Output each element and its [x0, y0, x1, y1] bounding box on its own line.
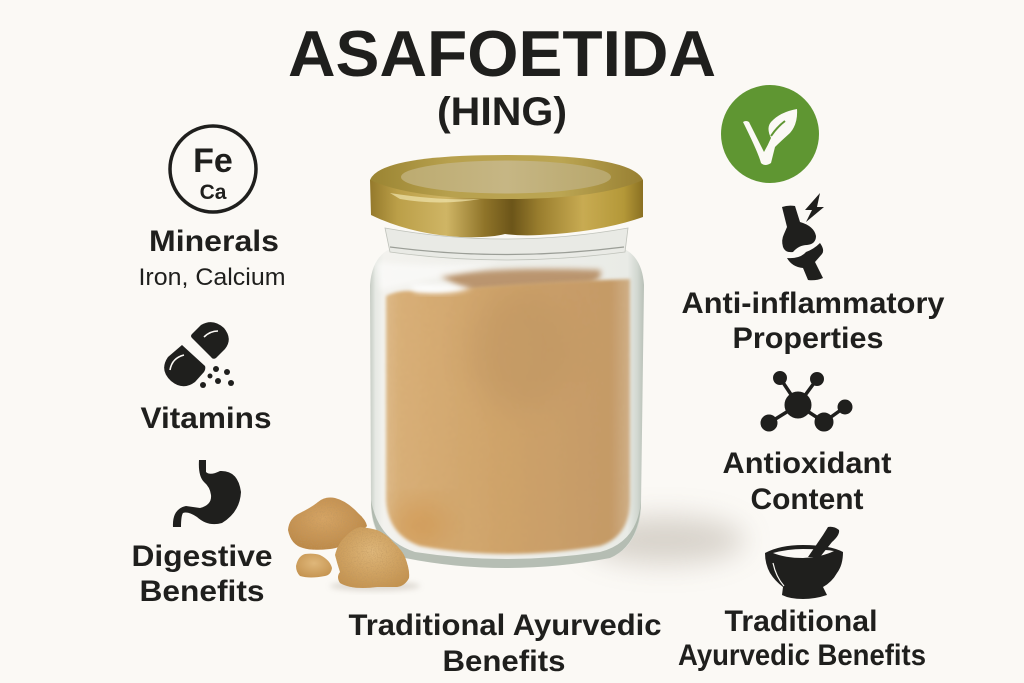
- heading: antioxidant content: Antioxidant: [722, 447, 892, 480]
- lid inner panel: [401, 160, 611, 194]
- icon: Fe Ca element circle: Ca: [200, 181, 227, 204]
- antioxidant group: [722, 372, 892, 516]
- vitamins group: [140, 322, 272, 435]
- heading: vitamins: Vitamins: [140, 402, 272, 435]
- resin lumps: [288, 498, 420, 591]
- icon: stomach: [173, 460, 241, 527]
- powder fill: [380, 270, 636, 565]
- bottom caption: [348, 609, 662, 678]
- anti-inflammatory group: [682, 193, 945, 355]
- lid highlight: [390, 193, 480, 202]
- heading: anti-inflammatory properties: Anti-inflammatory: [682, 287, 945, 320]
- icon: molecule: [761, 372, 852, 431]
- icon: vegan leaf badge: [721, 85, 819, 183]
- subtitle: (HING): [437, 90, 567, 134]
- bottom caption: Benefits: [442, 645, 566, 678]
- glass base: [371, 500, 641, 568]
- glass body: [370, 248, 644, 568]
- traditional benefits right group: Ayurvedic Benefits: [678, 639, 926, 672]
- anti-inflammatory group: Properties: [732, 322, 884, 355]
- digestive group: Benefits: [140, 575, 264, 608]
- powder back shade: [440, 269, 601, 292]
- title: ASAFOETIDA: [288, 17, 716, 90]
- traditional benefits right group: [678, 527, 926, 672]
- lid top: [370, 155, 643, 199]
- jar shadow: [585, 516, 745, 564]
- heading: traditional ayurvedic benefits: Traditional: [724, 605, 878, 638]
- bottom caption: Traditional Ayurvedic: [348, 609, 662, 642]
- lid: [370, 155, 643, 237]
- minerals group: [138, 126, 286, 291]
- text: iron, calcium: Iron, Calcium: [138, 264, 286, 291]
- glass highlight: [410, 285, 472, 293]
- neck rings: [385, 228, 628, 260]
- digestive group: [132, 460, 272, 608]
- lump large front: [335, 527, 409, 588]
- icon: joint with lightning: [782, 193, 824, 280]
- heading: minerals: Minerals: [149, 225, 279, 258]
- lid side: [370, 180, 643, 237]
- icon: capsule: [164, 322, 234, 388]
- heading: digestive benefits: Digestive: [132, 540, 272, 573]
- lump large left: [288, 498, 367, 550]
- icon: Fe Ca element circle: Fe: [193, 142, 233, 180]
- icon: Fe Ca element circle: [170, 126, 256, 212]
- antioxidant group: Content: [750, 483, 864, 516]
- lump small: [296, 554, 332, 578]
- jar with powder: [370, 155, 644, 568]
- icon: mortar and pestle: [765, 527, 843, 599]
